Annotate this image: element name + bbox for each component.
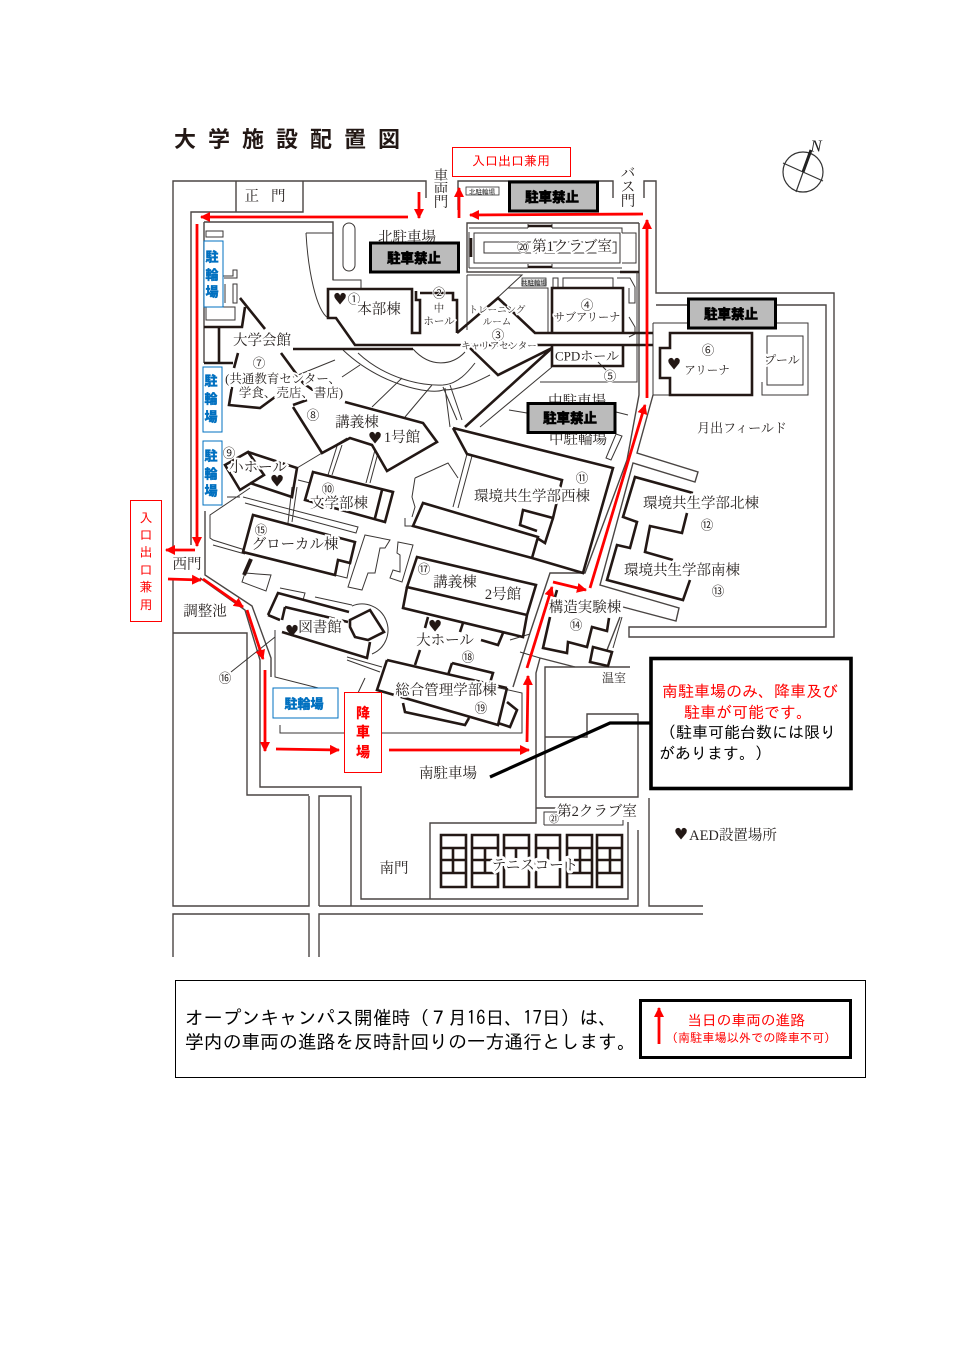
- building labels: 南門: [380, 860, 408, 877]
- thick club room details: [471, 226, 639, 272]
- building labels: プール: [764, 353, 800, 367]
- bicycle parking 2: 場: [204, 406, 218, 426]
- building labels: 門: [621, 193, 635, 210]
- building labels: 第2クラブ室: [557, 802, 637, 820]
- building labels: トレーニング: [469, 305, 526, 316]
- building labels: 門: [434, 194, 448, 211]
- callout: south parking note: があります。）: [659, 745, 771, 761]
- callout: south parking note: [651, 658, 851, 788]
- building labels: ⑨: [223, 442, 236, 462]
- no parking sign: arena: [688, 299, 776, 328]
- building labels: ㉑: [549, 810, 559, 826]
- building labels: ♥: [270, 472, 284, 490]
- building labels: ホール: [423, 316, 455, 328]
- building labels: ⑤: [604, 366, 617, 384]
- no parking sign: middle car park: [528, 404, 615, 432]
- building labels: ⑭: [570, 614, 583, 634]
- label: drop-off area: 降: [356, 703, 370, 723]
- building labels: 大学会館: [233, 331, 291, 349]
- small room 21: [544, 812, 623, 825]
- building labels: ②: [433, 282, 446, 302]
- callout: south parking note: 駐車が可能です。: [684, 704, 812, 720]
- building labels: ス: [621, 180, 635, 196]
- bicycle parking 3: 場: [204, 480, 218, 500]
- notice text: 学内の車両の進路を反時計回りの一方通行とします。: [185, 1032, 636, 1052]
- building labels: 総合管理学部棟: [395, 682, 497, 699]
- building labels: 環境共生学部南棟: [624, 562, 740, 579]
- no parking sign: arena: 駐車禁止: [704, 303, 758, 323]
- building labels: 環境共生学部北棟: [643, 495, 759, 512]
- label: entrance/exit west: 口: [140, 564, 152, 576]
- icon: compass: N: [809, 136, 823, 156]
- building labels: 月出フィールド: [697, 420, 787, 436]
- label: drop-off area: [344, 692, 382, 772]
- building labels: CPDホール: [555, 348, 619, 364]
- no parking sign: middle car park: 駐車禁止: [543, 407, 597, 427]
- label: entrance/exit top: 入口出口兼用: [472, 154, 550, 168]
- bicycle parking 3: 輪: [204, 464, 218, 482]
- building labels: 第1クラブ室: [532, 237, 612, 255]
- building labels: 両: [434, 181, 448, 198]
- building labels: 1号館: [384, 428, 421, 446]
- bicycle parking 2: 輪: [204, 388, 218, 408]
- building labels: ⑳: [517, 238, 529, 256]
- legend box: [640, 1000, 850, 1058]
- legend text: （南駐車場以外での降車不可）: [666, 1031, 836, 1044]
- legend text: 当日の車両の進路: [687, 1012, 805, 1028]
- building labels: 講義棟: [335, 414, 379, 431]
- building labels: ③: [492, 324, 505, 344]
- building labels: ⑬: [712, 580, 725, 600]
- AED legend: [674, 824, 777, 844]
- building labels: ⑩: [322, 478, 335, 498]
- building labels: [172, 166, 800, 877]
- bicycle parking 2: 駐: [204, 370, 218, 390]
- building labels: ⑥: [702, 340, 715, 358]
- building labels: 本部棟: [357, 301, 401, 318]
- red route arrows: [166, 188, 647, 751]
- building labels: 中駐輪場: [549, 430, 607, 448]
- thin campus detail lines: [206, 223, 808, 733]
- building labels: 西門: [172, 556, 202, 573]
- callout: south parking note: 南駐車場のみ、降車及び: [662, 682, 838, 699]
- building labels: ⑱: [462, 646, 475, 666]
- building labels: ♥: [333, 290, 347, 308]
- AED legend: AED設置場所: [689, 827, 777, 844]
- campus map: [172, 166, 834, 957]
- road outlines: [173, 181, 834, 957]
- building labels: ④: [581, 294, 594, 314]
- building labels: ⑲: [475, 698, 488, 716]
- no parking sign: north gate: [510, 182, 598, 211]
- building labels: ♥: [428, 616, 442, 636]
- title: 大学施設配置図: [174, 122, 412, 154]
- bicycle parking 1: 駐: [205, 246, 219, 266]
- building labels: ⑯: [219, 668, 232, 686]
- building labels: ♥: [285, 622, 299, 640]
- bicycle parking 2: [203, 367, 222, 432]
- building labels: 学食、売店、書店): [239, 385, 343, 400]
- label: entrance/exit west: [130, 500, 162, 622]
- label: entrance/exit west: 入: [140, 512, 152, 524]
- label: entrance/exit top: [452, 148, 570, 176]
- AED legend: ♥: [674, 824, 688, 844]
- building labels: 大ホール: [416, 632, 474, 649]
- building labels: 文学部棟: [310, 495, 368, 512]
- label: drop-off area: 場: [356, 742, 370, 762]
- bicycle parking 1: 輪: [205, 264, 219, 284]
- label: entrance/exit west: 出: [140, 546, 152, 558]
- building labels: ⑧: [307, 404, 320, 424]
- club room block: [469, 224, 636, 268]
- label: entrance/exit west: 用: [140, 598, 152, 612]
- building labels: ⑮: [255, 520, 268, 538]
- no parking sign: north car park: [370, 243, 458, 272]
- callout leader line: [490, 723, 650, 777]
- building labels: サブアリーナ: [554, 311, 620, 324]
- bicycle parking 4: 駐輪場: [284, 694, 324, 712]
- building labels: 北駐車場: [378, 228, 436, 246]
- building labels: 図書館: [298, 618, 342, 636]
- callout: south parking note: （駐車可能台数には限り: [660, 724, 836, 740]
- building labels: 中: [434, 302, 444, 314]
- legend text: [666, 1012, 836, 1044]
- building labels: ルーム: [483, 318, 511, 328]
- bicycle parking 3: 駐: [204, 446, 218, 464]
- building labels: 小ホール: [229, 459, 287, 476]
- tennis courts: [441, 835, 622, 887]
- label: entrance/exit west: 兼: [140, 580, 152, 594]
- building labels: 中駐車場: [548, 392, 606, 410]
- building labels: ⑦: [253, 352, 266, 372]
- building labels: 南駐車場: [419, 764, 477, 782]
- building labels: 調整池: [183, 602, 227, 620]
- building labels: バ: [621, 166, 635, 182]
- building labels: ⑪: [576, 468, 589, 486]
- building labels: (共通教育センター、: [225, 371, 341, 386]
- building outlines: [204, 288, 752, 727]
- building labels: 講義棟: [433, 574, 477, 591]
- building labels: 温室: [602, 671, 626, 685]
- bicycle parking 3: [203, 441, 222, 505]
- middle small label: 共駐輪場: [521, 277, 548, 287]
- building labels: 2号館: [485, 585, 522, 603]
- notice text: オープンキャンパス開催時（７月16日、17日）は、: [185, 1008, 617, 1028]
- bicycle parking 4: [273, 688, 338, 718]
- building labels: 構造実験棟: [549, 598, 622, 616]
- bicycle parking 1: 場: [205, 282, 219, 300]
- notice panel: [176, 980, 866, 1078]
- building labels: 環境共生学部西棟: [474, 488, 590, 505]
- building labels: ♥: [667, 354, 681, 374]
- building labels: ♥: [368, 428, 382, 448]
- building labels: ①: [348, 288, 361, 308]
- building labels: グローカル棟: [252, 536, 339, 553]
- no parking sign: north gate: 駐車禁止: [525, 186, 579, 206]
- building labels: テニスコート: [492, 858, 578, 874]
- building labels: アリーナ: [684, 365, 730, 377]
- label: entrance/exit west: 口: [140, 528, 152, 542]
- building labels: ⑰: [418, 558, 431, 578]
- label: drop-off area: 車: [356, 722, 370, 742]
- notice text: [185, 1008, 636, 1052]
- north bicycle parking label: 北駐輪場: [469, 186, 496, 196]
- building labels: 正門: [244, 188, 298, 205]
- icon: compass: [783, 136, 823, 192]
- building labels: 車: [434, 167, 448, 185]
- building labels: ⑫: [701, 514, 714, 534]
- building labels: キャリアセンター: [461, 341, 537, 352]
- legend arrow: [658, 1008, 660, 1044]
- no parking sign: north car park: 駐車禁止: [387, 247, 441, 267]
- bicycle parking 1: [204, 241, 223, 307]
